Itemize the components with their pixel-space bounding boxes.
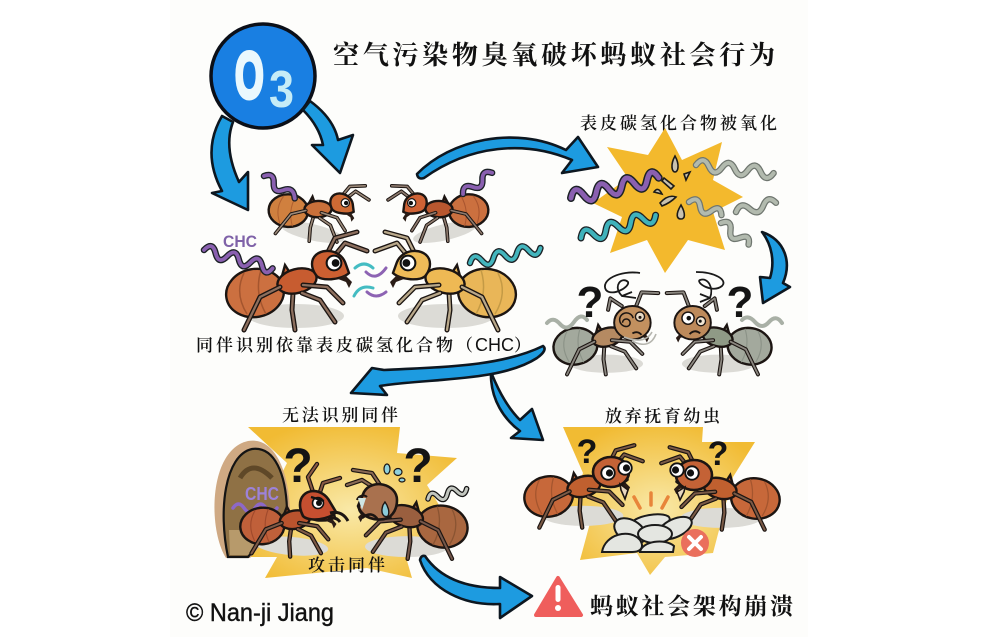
alarm dashes (634, 493, 668, 508)
exchange squiggles (354, 264, 386, 296)
arrow: forked to both outcomes (351, 346, 545, 440)
scene: oxidation burst (569, 128, 777, 273)
caption: recognition relies on CHC: ） (514, 336, 531, 355)
large yellow ant (375, 232, 520, 330)
grey ant left (551, 292, 658, 374)
crying ant (358, 490, 471, 559)
arrow: attack to collapse (420, 556, 532, 618)
CHC strand purple small (261, 172, 297, 202)
scene: confused grey ants (547, 272, 782, 374)
question mark: ? (403, 440, 433, 493)
caption: recognition relies on CHC: CHC (475, 335, 514, 355)
crying ant head (357, 484, 397, 520)
door CHC strand (233, 504, 277, 512)
grey strand (427, 484, 468, 503)
teal strand (579, 209, 657, 244)
caption: recognition relies on CHC: 同伴识别依靠表皮碳氢化合物（ (196, 335, 473, 355)
attacker head (300, 491, 348, 522)
conclusion text: 蚂蚁社会架构崩溃 (590, 594, 793, 619)
caption: attacking nestmates: 攻击同伴 (308, 556, 385, 575)
question marks: ? (577, 433, 597, 471)
attacker antennae (308, 464, 340, 492)
grey oxidised strands (687, 160, 777, 248)
caption: cannot recognise nestmates: 无法识别同伴 (282, 406, 398, 425)
CHC teal strand (469, 243, 542, 268)
small ant right (385, 165, 496, 252)
icon: warning triangle (536, 578, 581, 615)
dizzy spiral right (696, 272, 723, 302)
yellow star (593, 128, 743, 273)
arrow: ozone to right ants (303, 101, 353, 173)
purple strand (569, 171, 660, 205)
arrow: ozone to left ants (212, 116, 248, 210)
arrow: burst to confused ants (760, 232, 790, 303)
title: 空气污染物臭氧破坏蚂蚁社会行为 (333, 40, 775, 70)
ant right (661, 447, 783, 530)
grey strands on ants (547, 316, 782, 328)
question mark left: ? (577, 278, 603, 327)
sweat drops (384, 464, 405, 482)
nest door (214, 441, 290, 558)
ozone badge: 3 (269, 61, 294, 119)
no symbol (681, 529, 709, 557)
ant left (521, 445, 643, 528)
scene: abandoned larvae (521, 427, 783, 575)
question mark: ? (283, 440, 313, 493)
dizzy spiral left (605, 272, 640, 298)
CHC purple strand (203, 245, 274, 274)
question mark right: ? (727, 278, 753, 327)
burst (240, 427, 460, 578)
scene: attacking nestmates (214, 427, 471, 578)
scene: large ants recognising each other (203, 232, 542, 330)
crying ant antennae (347, 470, 380, 487)
scene: small ants with CHC (261, 165, 496, 252)
arrow to cannot recognise (351, 346, 545, 395)
ozone badge: O (235, 40, 264, 113)
larvae (602, 512, 695, 552)
ant right face (670, 460, 712, 500)
CHC strand purple small right (460, 169, 495, 198)
ozone badge (211, 24, 315, 128)
ant left face (593, 457, 632, 499)
small ant left (261, 165, 372, 252)
caption: CHC oxidised: 表皮碳氢化合物被氧化 (580, 113, 777, 133)
door CHC label: CHC (245, 484, 279, 504)
burst (563, 427, 755, 575)
question mark right: ? (708, 435, 728, 473)
breath wisps (624, 332, 656, 344)
CHC label: CHC (223, 232, 257, 251)
arrow to abandoned brood (491, 372, 543, 440)
background panel (170, 0, 808, 637)
credit: © Nan-ji Jiang (186, 599, 334, 627)
fragments (654, 156, 690, 219)
caption: abandon brood care: 放弃抚育幼虫 (605, 407, 721, 426)
grey ant right (667, 292, 774, 374)
attacker ant (235, 492, 339, 560)
large red ant (222, 232, 367, 330)
arrow: to oxidation star (417, 137, 598, 178)
